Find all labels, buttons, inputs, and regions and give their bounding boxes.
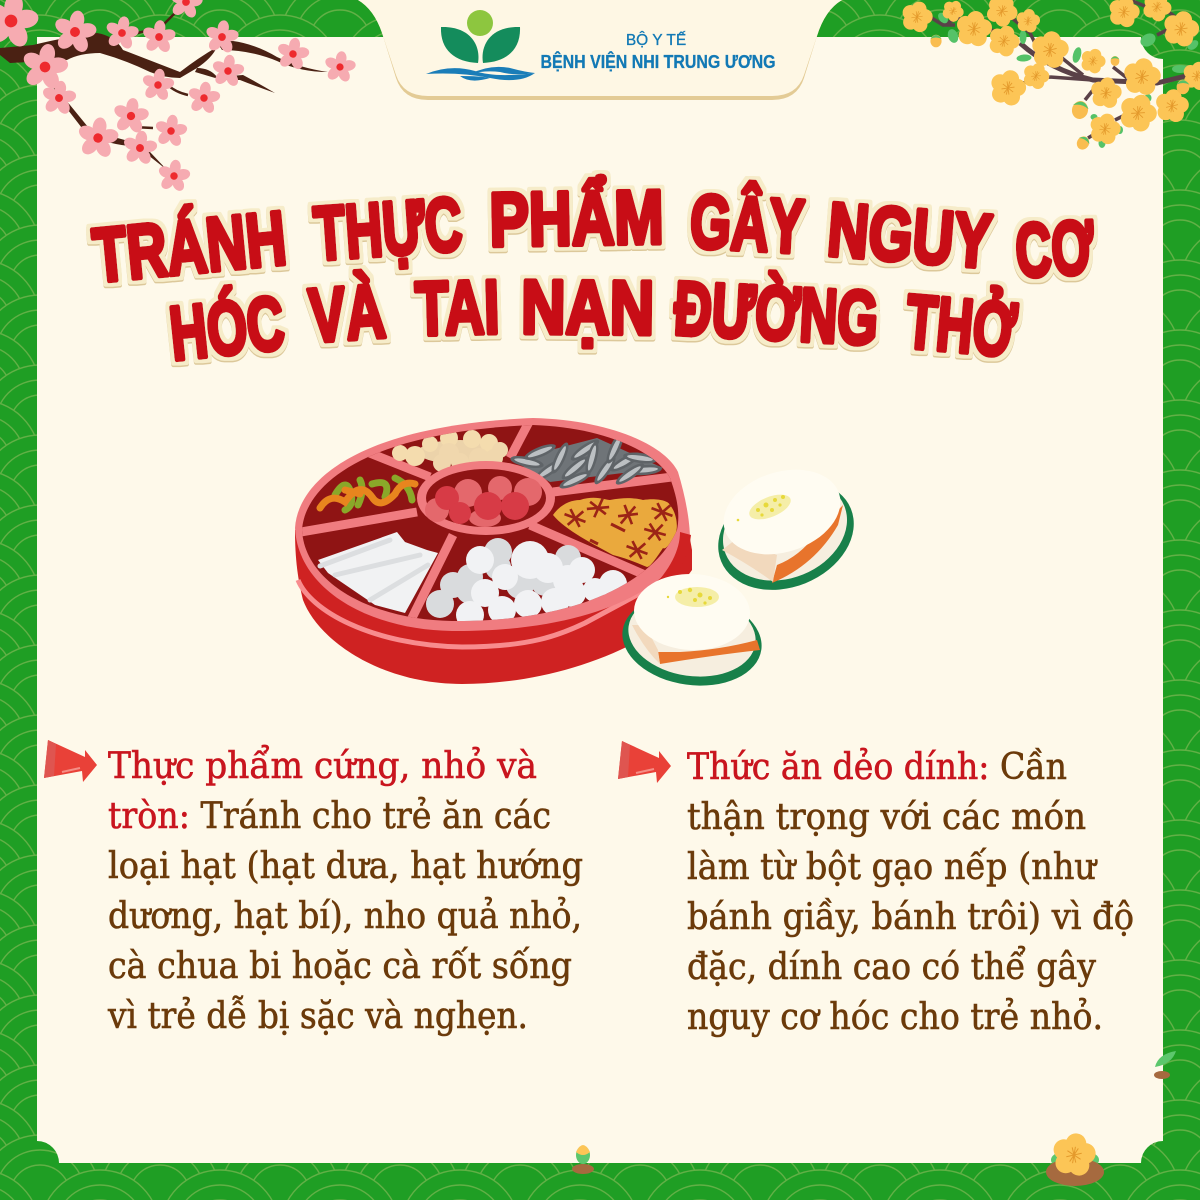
title: ĐƯỜNG — [672, 266, 880, 362]
title: TAI — [414, 265, 500, 352]
text block: right column: làm từ bột gạo nếp (như — [687, 847, 1098, 888]
title: THỞ — [903, 279, 1020, 374]
text block: right column: thận trọng với các món — [687, 797, 1086, 838]
decoration: leaf on right border — [1154, 1051, 1176, 1079]
illustration: bánh giầy back — [702, 455, 870, 609]
title: HÓC — [166, 280, 288, 377]
compartments — [302, 425, 678, 621]
text block: right column — [687, 747, 1134, 1038]
icon: megaphone left — [44, 740, 97, 782]
title: PHẨM — [489, 174, 664, 263]
text block: left column — [107, 745, 583, 1037]
logo header tab — [358, 0, 842, 100]
white sticks — [318, 532, 438, 613]
tray body — [295, 528, 692, 684]
nuts — [392, 429, 508, 472]
text block: left column: loại hạt (hạt dưa, hạt hướng — [108, 846, 583, 887]
text block: left column: tròn: Tránh cho trẻ ăn các — [108, 796, 551, 837]
illustration: bánh giầy front — [616, 572, 768, 694]
dried fruit strips — [320, 478, 415, 510]
title: NGUY — [825, 187, 995, 285]
title: NẠN — [521, 265, 655, 351]
text block: left column: vì trẻ dễ bị sặc và nghẹn. — [107, 996, 528, 1037]
illustration: mứt tray — [290, 415, 692, 684]
logo text — [540, 32, 776, 72]
decoration: flower in nest — [1046, 1129, 1104, 1186]
title: VÀ — [306, 269, 388, 359]
text block: right column: nguy cơ hóc cho trẻ nhỏ. — [687, 997, 1103, 1038]
title — [89, 174, 1096, 377]
cherry blossom branch — [0, 0, 359, 195]
text block: right column: bánh giầy, bánh trôi) vì độ — [687, 897, 1134, 938]
title: THỰC — [311, 182, 465, 277]
white balls — [426, 538, 627, 629]
text block: left column: dương, hạt bí), nho quả nhỏ, — [108, 896, 582, 937]
logo text: BỘ Y TẾ — [626, 32, 686, 49]
orange candies — [553, 497, 677, 567]
decoration: bud on bottom border — [572, 1145, 594, 1174]
title: GÂY — [688, 178, 806, 270]
centre bowl — [417, 461, 555, 535]
logo mark — [426, 10, 535, 81]
sunflower seeds — [510, 438, 662, 488]
text block: right column: đặc, dính cao có thể gây — [687, 946, 1097, 988]
icon: megaphone right — [618, 741, 671, 783]
text block: right column: Thức ăn dẻo dính: Cần — [687, 747, 1067, 788]
tray rim — [295, 418, 690, 631]
yellow apricot blossom branch — [896, 0, 1200, 152]
logo text: BỆNH VIỆN NHI TRUNG ƯƠNG — [540, 51, 776, 72]
title: TRÁNH — [89, 196, 290, 299]
title: CƠ — [1013, 205, 1096, 294]
text block: left column: Thực phẩm cứng, nhỏ và — [108, 745, 537, 787]
text block: left column: cà chua bi hoặc cà rốt sống — [108, 946, 572, 987]
